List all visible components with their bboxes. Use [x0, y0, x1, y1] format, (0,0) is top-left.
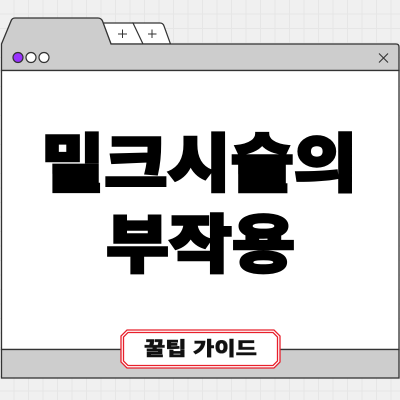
title: 밀크시슬의: [41, 130, 357, 200]
tab: plus tabs: [103, 23, 170, 44]
badge: tip guide: 꿀팁 가이드: [144, 338, 257, 360]
window footer bar: [2, 350, 399, 378]
window header bar: [2, 18, 399, 70]
window control dots: [13, 52, 49, 62]
icon: close: [379, 54, 388, 62]
title: 부작용: [106, 211, 295, 281]
badge: tip guide: [121, 330, 280, 368]
title: [41, 130, 357, 281]
window body: [2, 70, 399, 350]
